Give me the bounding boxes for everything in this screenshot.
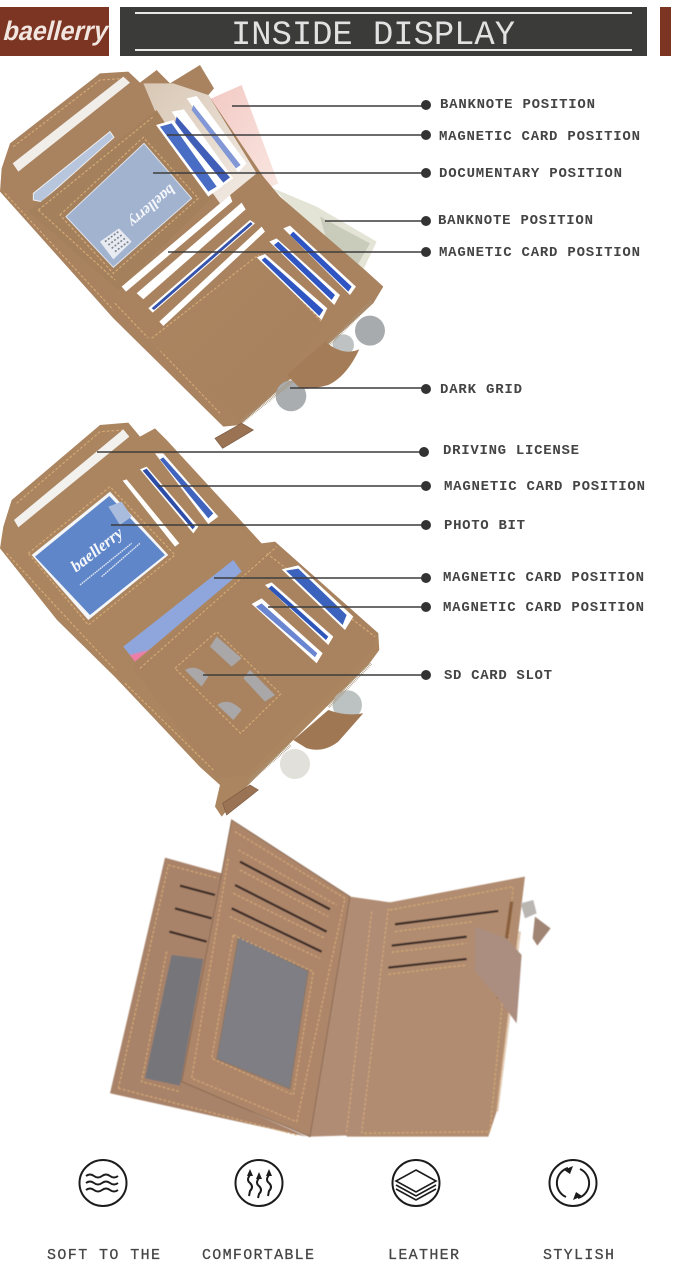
- callout: banknote position 2: [325, 213, 593, 229]
- callout: sd card slot: [203, 668, 552, 684]
- callout: driving license: [97, 443, 579, 459]
- callouts wallet 1: [153, 97, 640, 398]
- wallet back flaps: [0, 65, 383, 427]
- callout: dark grid: [290, 382, 522, 398]
- document window: baellerry: [125, 181, 179, 231]
- zipper: [248, 663, 371, 782]
- callout: magnetic card position 4: MAGNETIC CARD POSITION: [443, 570, 644, 586]
- SD card panel: [175, 632, 281, 733]
- callout: magnetic card position 5: [268, 600, 644, 616]
- callouts wallet 2: [97, 443, 645, 684]
- title bar: [120, 7, 647, 56]
- callout: banknote position: BANKNOTE POSITION: [440, 97, 595, 113]
- callout: magnetic card position 2: MAGNETIC CARD POSITION: [439, 245, 640, 261]
- callout: magnetic card position 3: [158, 479, 645, 495]
- right slots: [252, 565, 353, 663]
- top card pocket: [143, 83, 257, 203]
- wallet photo 2: [0, 423, 379, 817]
- callout: driving license: DRIVING LICENSE: [443, 443, 579, 459]
- driving license slot: [14, 429, 129, 527]
- left panel slots: [123, 453, 218, 547]
- feature: soft to the touch: [47, 1160, 160, 1264]
- photo window: [217, 937, 308, 1089]
- title bar: INSIDE DISPLAY: [231, 17, 515, 55]
- callout: magnetic card position 3: MAGNETIC CARD POSITION: [444, 479, 645, 495]
- suede pocket: [147, 257, 325, 422]
- icon: waves: [80, 1160, 126, 1206]
- pink card: [123, 560, 242, 662]
- icon: heat arrows: [236, 1160, 282, 1206]
- accent bar: [660, 7, 671, 56]
- strap tab: [293, 710, 363, 750]
- strap tab: [287, 342, 359, 389]
- callout: magnetic card position 4: [214, 570, 644, 586]
- callout: documentary position: DOCUMENTARY POSITION: [439, 166, 622, 182]
- zipper pull: [521, 900, 551, 946]
- front panel: [182, 820, 350, 1137]
- feature: stylish: STYLISH: [543, 1247, 614, 1264]
- strap tab: [475, 927, 522, 1023]
- feature: comfortable: [202, 1160, 314, 1264]
- banknote pink: [209, 85, 278, 190]
- callout: magnetic card position: [167, 129, 640, 145]
- feature: soft to the touch: SOFT TO THE: [47, 1247, 160, 1264]
- icon: layers: [392, 1160, 440, 1206]
- flap slot: [13, 77, 130, 172]
- wallet photo 3: [110, 820, 551, 1137]
- coins: [280, 690, 362, 779]
- header banner: [0, 7, 671, 56]
- callout: banknote position: [232, 97, 595, 113]
- zipper: [242, 302, 372, 422]
- callout: magnetic card position: MAGNETIC CARD POSITION: [439, 129, 640, 145]
- callout: documentary position: [153, 166, 622, 182]
- right panel: [132, 542, 378, 778]
- right panel: [347, 877, 525, 1137]
- coins: [276, 316, 385, 411]
- lower left slots: [122, 195, 265, 326]
- brand logo: baellerry: [1, 15, 113, 46]
- callout: magnetic card position 2: [168, 245, 640, 261]
- left card: [33, 132, 114, 202]
- spine: [310, 898, 390, 1137]
- callout: dark grid: DARK GRID: [440, 382, 522, 398]
- top right cards: [156, 96, 247, 197]
- callout: magnetic card position 5: MAGNETIC CARD POSITION: [443, 600, 644, 616]
- feature: leather: LEATHER: [388, 1247, 459, 1264]
- wallet body: [0, 423, 379, 817]
- zipper pull: [223, 785, 258, 815]
- zipper pull: [215, 423, 253, 448]
- wallet photo 1: [0, 65, 385, 448]
- feature: stylish: [543, 1160, 614, 1264]
- callout: photo bit: PHOTO BIT: [444, 518, 525, 534]
- inner left panel: [28, 110, 213, 290]
- callout: banknote position 2: BANKNOTE POSITION: [438, 213, 593, 229]
- icon: rotating arrows: [550, 1160, 596, 1206]
- banknote green: [273, 188, 377, 273]
- photo window: baellerry: [67, 523, 127, 576]
- photo window: [32, 492, 168, 620]
- document window: [60, 137, 198, 273]
- feature: leather: [388, 1160, 459, 1264]
- zipper: [497, 932, 519, 1112]
- feature: comfortable: COMFORTABLE: [202, 1247, 314, 1264]
- callout: sd card slot: SD CARD SLOT: [444, 668, 552, 684]
- brand logo: [0, 7, 113, 56]
- back panel: [110, 858, 307, 1137]
- callout: photo bit: [111, 518, 525, 534]
- right slots: [257, 226, 356, 320]
